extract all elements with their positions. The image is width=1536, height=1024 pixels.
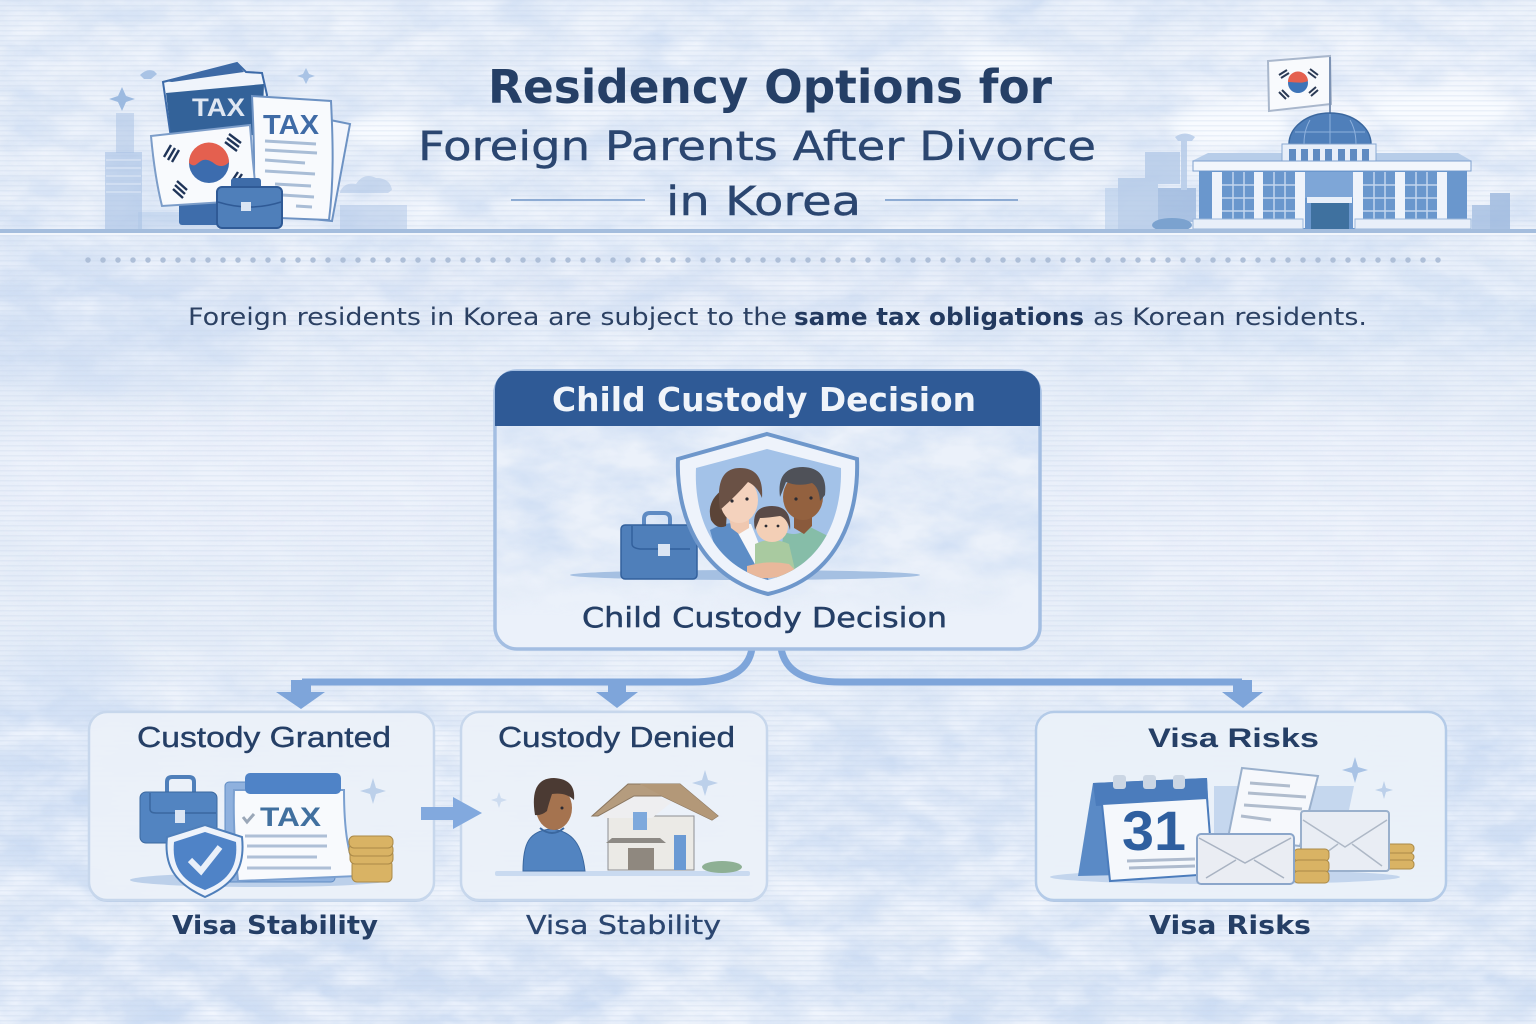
intro text [188, 303, 1367, 331]
icon: briefcase [140, 777, 217, 843]
back page [312, 120, 350, 221]
roof and facade [1192, 153, 1472, 161]
ground [495, 871, 750, 876]
intro text: same tax obligations [794, 303, 1084, 331]
blue tax book [163, 63, 267, 225]
icon: shield with family [678, 434, 857, 594]
panel: custody granted [89, 712, 434, 902]
icon: back folder [1214, 786, 1354, 834]
mother [710, 523, 768, 580]
caption: visa stability granted: Visa Stability [172, 911, 378, 941]
icon: calendar: 31 [1122, 799, 1186, 862]
dotted divider [88, 257, 1447, 263]
heading: Visa Risks [1148, 723, 1319, 753]
title: in Korea [666, 179, 861, 225]
icon: house [592, 784, 742, 873]
icon: boy [523, 778, 585, 871]
document [252, 96, 333, 220]
intro text: Foreign residents in Korea are subject to the [188, 303, 787, 331]
sparkles [692, 770, 718, 796]
intro text: as Korean residents. [1093, 303, 1367, 331]
caption: visa risks: Visa Risks [1149, 911, 1311, 941]
icon: tax book, flag, document and briefcase [109, 63, 350, 228]
sparkles [1342, 757, 1368, 783]
Korean flag [151, 125, 257, 206]
sparkle [360, 778, 386, 804]
icon: tax document [225, 773, 358, 882]
icon: right coins [1384, 844, 1414, 869]
arrows: connectors from decision panel [276, 648, 1263, 709]
dome [1282, 113, 1376, 161]
caption: Child Custody Decision [582, 601, 947, 634]
caption: visa stability denied: Visa Stability [526, 911, 721, 941]
briefcase [217, 178, 282, 228]
icon: envelope back [1301, 811, 1389, 871]
icon: document [1228, 768, 1318, 846]
heading band: Child Custody Decision [552, 380, 976, 419]
sparkles [109, 87, 135, 111]
title: Residency Options for [488, 60, 1052, 114]
ground shadow [1050, 870, 1400, 884]
document: TAX [263, 109, 319, 140]
flag [1268, 56, 1331, 117]
icon: front coins [1294, 849, 1329, 883]
panel: custody denied [461, 712, 767, 902]
heading: Custody Denied [498, 722, 735, 754]
header left: city skyline [105, 113, 407, 230]
ground shadow [130, 873, 390, 887]
title [418, 60, 1096, 225]
icon: coins [349, 836, 393, 882]
icon: tax document: TAX [260, 802, 321, 832]
header ground line [0, 229, 1536, 235]
skyline [1105, 134, 1510, 230]
header right: National Assembly building and flag [1105, 56, 1510, 232]
panel: child custody decision [495, 371, 1040, 649]
icon: briefcase [621, 513, 697, 579]
child [755, 540, 795, 576]
panel: visa risks [1036, 712, 1446, 902]
father [776, 528, 826, 578]
icon: calendar [1078, 775, 1213, 881]
title: Foreign Parents After Divorce [418, 124, 1096, 170]
icon: check shield [166, 825, 243, 897]
ground shadow [570, 570, 920, 580]
heading: Custody Granted [137, 722, 391, 754]
heading band [495, 371, 1040, 426]
arrow: granted to denied [421, 797, 482, 829]
icon: envelope front [1197, 834, 1294, 884]
blue tax book: TAX [192, 94, 245, 122]
